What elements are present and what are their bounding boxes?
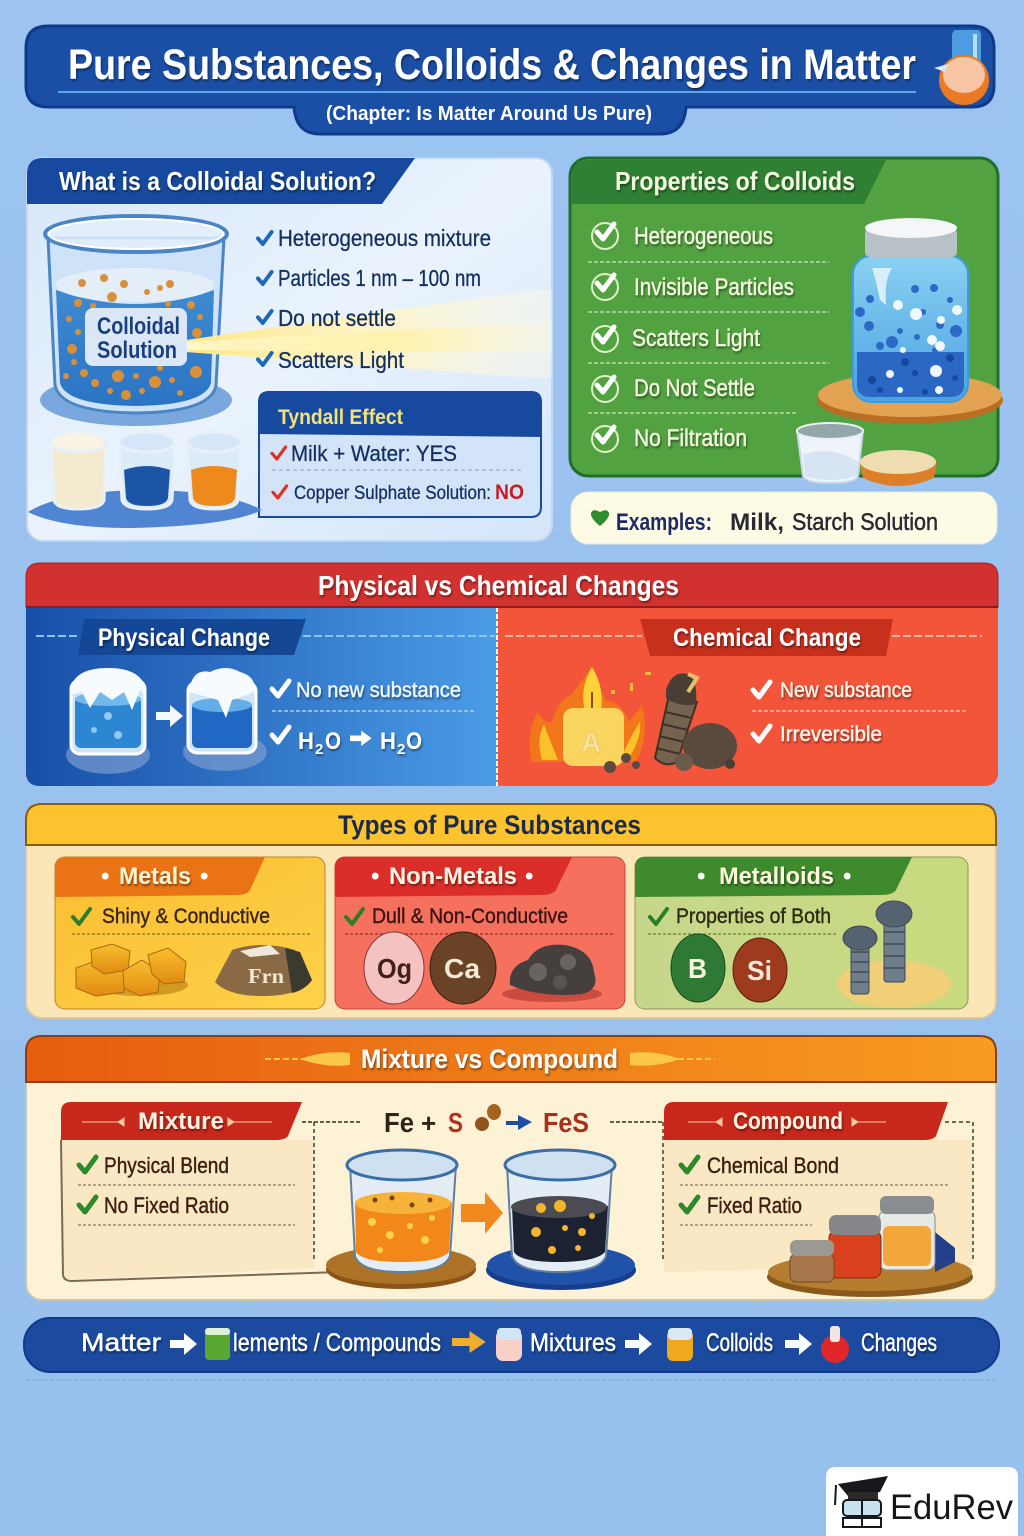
box: compound: Fixed Ratio — [707, 1193, 802, 1218]
icon: Og sphere: Og — [377, 953, 412, 984]
callout: examples: Examples: — [616, 509, 712, 536]
heading: types: Types of Pure Substances — [338, 810, 641, 840]
arrow: orange — [461, 1192, 503, 1234]
checklist: chemical change — [752, 679, 967, 746]
card: non-metals: Non-Metals — [389, 863, 517, 890]
logo: EduRev: EduRev — [890, 1488, 1013, 1527]
panel: tyndall effect: NO — [495, 481, 524, 504]
icon: wooden plate — [817, 373, 1003, 424]
card: non-metals: Dull & Non-Conductive — [372, 905, 568, 928]
checklist: colloid facts: Particles 1 nm – 100 nm — [278, 265, 481, 291]
card: non-metals — [335, 857, 625, 1009]
card: metals: • — [200, 863, 208, 890]
checklist: physical change: H — [298, 728, 314, 755]
icon: beaker with colloidal particles — [40, 216, 232, 426]
callout: examples — [571, 492, 997, 544]
card: metalloids — [635, 857, 968, 1009]
box: mixture — [61, 1102, 340, 1281]
heading: properties: Properties of Colloids — [615, 166, 855, 196]
icon: metalloid bolts — [837, 901, 951, 1008]
heading: properties — [572, 160, 886, 204]
card: metalloids: • — [843, 863, 851, 890]
checklist: physical change: O — [406, 728, 422, 755]
icon: melting ice glasses — [66, 668, 267, 774]
checklist: properties: Scatters Light — [632, 325, 760, 352]
icon: green tube — [205, 1328, 230, 1360]
icon: Og sphere — [364, 932, 424, 1004]
title text: Pure Substances, Colloids & Changes in Matter — [68, 41, 916, 89]
subtitle: (Chapter: Is Matter Around Us Pure) — [326, 103, 652, 125]
equation: Fe + S to FeS — [302, 1104, 664, 1138]
equation: Fe + S to FeS: + — [421, 1108, 436, 1138]
panel: tyndall effect: Copper Sulphate Solution: — [294, 483, 491, 504]
icon: three glasses — [28, 432, 262, 528]
heading: mixture vs compound: Mixture vs Compound — [361, 1044, 618, 1074]
card: metalloids: Metalloids — [719, 863, 834, 890]
icon: Ca sphere — [430, 932, 496, 1004]
icon: flask — [934, 30, 989, 105]
title banner — [26, 26, 994, 134]
checklist: physical change: No new substance — [296, 679, 461, 702]
icon: carbon rock — [502, 945, 602, 1002]
dashed separator — [26, 1379, 995, 1381]
checklist: properties: Heterogeneous — [634, 223, 773, 250]
panel: what is a colloidal solution — [27, 158, 552, 541]
icon: boron sphere — [671, 934, 725, 1002]
card: non-metals: • — [525, 863, 533, 890]
flow bar: matter to changes: Changes — [861, 1329, 937, 1357]
icon: Ca sphere: Ca — [444, 953, 480, 984]
heading: mixture vs compound — [26, 1036, 996, 1082]
checklist: properties: No Filtration — [634, 425, 747, 452]
icon: francium rock: Frn — [248, 964, 284, 988]
checklist: colloid facts — [258, 225, 491, 373]
box: compound: Compound — [733, 1108, 843, 1135]
flow bar: matter to changes: lements / Compounds — [233, 1329, 441, 1357]
callout: examples: Starch Solution — [792, 509, 938, 536]
card: metalloids: • — [697, 863, 705, 890]
equation: Fe + S to FeS: S — [448, 1107, 463, 1138]
icon: silicon sphere: Si — [747, 955, 772, 986]
icon: starch bowl — [860, 450, 937, 486]
card: non-metals: • — [371, 863, 379, 890]
icon: milk cup — [797, 423, 863, 483]
panel: tyndall effect — [259, 392, 541, 517]
tab: physical change: Physical Change — [98, 624, 270, 652]
panel: properties of colloids — [570, 158, 1003, 486]
checklist: properties — [588, 223, 829, 452]
heading: physical vs chemical: Physical vs Chemical Changes — [318, 570, 679, 601]
card: metals: • — [101, 863, 109, 890]
card: metals: Metals — [119, 863, 191, 890]
icon: yellow jar — [667, 1328, 693, 1361]
icon: francium rock — [215, 945, 312, 996]
icon: graduation cap with book — [835, 1476, 888, 1527]
box: compound — [663, 1102, 973, 1272]
icon: beaker black compound — [486, 1150, 636, 1290]
heading: colloidal solution — [27, 158, 415, 204]
flow bar: matter to changes: Matter — [81, 1329, 161, 1357]
tab: chemical change: Chemical Change — [673, 624, 861, 652]
checklist: colloid facts: Scatters Light — [278, 347, 405, 373]
checklist: physical change: H — [380, 728, 396, 755]
label: colloidal solution: Colloidal — [97, 313, 180, 340]
heading: types — [26, 804, 996, 845]
checklist: properties: Invisible Particles — [634, 274, 794, 301]
tab: physical change — [78, 619, 306, 655]
icon: gold nuggets — [76, 944, 188, 996]
checklist: colloid facts: Heterogeneous mixture — [278, 225, 491, 251]
checklist: physical change: 2 — [397, 741, 405, 758]
icon: burning candle — [530, 667, 682, 773]
checklist: colloid facts: Do not settle — [278, 305, 396, 331]
icon: colloid jar — [853, 218, 968, 402]
heading: colloidal solution: What is a Colloidal Solution? — [59, 166, 376, 196]
card: metals: Shiny & Conductive — [102, 905, 270, 928]
checklist: physical change — [272, 679, 475, 758]
panel: tyndall effect: Milk + Water: YES — [291, 441, 457, 466]
icon: rusted bolt and rock — [655, 673, 737, 771]
equation: Fe + S to FeS: FeS — [543, 1107, 589, 1138]
checklist: chemical change: New substance — [780, 679, 912, 702]
box: mixture: Physical Blend — [104, 1153, 229, 1178]
equation: Fe + S to FeS: Fe — [384, 1107, 414, 1138]
checklist: chemical change: Irreversible — [780, 723, 882, 746]
icon: silicon sphere — [733, 938, 787, 1002]
card: metalloids: Properties of Both — [676, 905, 831, 928]
flow bar: matter to changes — [24, 1318, 999, 1372]
checklist: physical change: O — [325, 728, 341, 755]
box: mixture: Mixture — [138, 1108, 224, 1135]
flow bar: matter to changes: Colloids — [706, 1329, 773, 1357]
box: mixture: No Fixed Ratio — [104, 1193, 229, 1218]
checklist: physical change: 2 — [315, 741, 323, 758]
card: metals — [55, 857, 325, 1009]
panel: types of pure substances — [26, 804, 996, 1018]
icon: boron sphere: B — [688, 953, 707, 984]
light beam — [186, 290, 552, 378]
icon: beaker orange mixture — [326, 1150, 476, 1289]
logo: EduRev — [826, 1467, 1018, 1536]
icon: pink jar — [496, 1328, 522, 1361]
icon: compound jars on plate — [767, 1196, 973, 1297]
callout: examples: Milk, — [730, 509, 784, 536]
panel: mixture vs compound — [26, 1036, 996, 1300]
icon: red flask — [821, 1326, 849, 1363]
label: colloidal solution — [85, 308, 187, 366]
box: compound: Chemical Bond — [707, 1153, 839, 1178]
checklist: properties: Do Not Settle — [634, 375, 755, 402]
tab: chemical change — [640, 619, 893, 656]
panel: physical vs chemical changes — [26, 563, 998, 786]
icon: burning candle: A — [581, 727, 601, 758]
panel: tyndall effect: Tyndall Effect — [278, 406, 403, 429]
label: colloidal solution: Solution — [97, 337, 177, 364]
flow bar: matter to changes: Mixtures — [530, 1329, 616, 1357]
